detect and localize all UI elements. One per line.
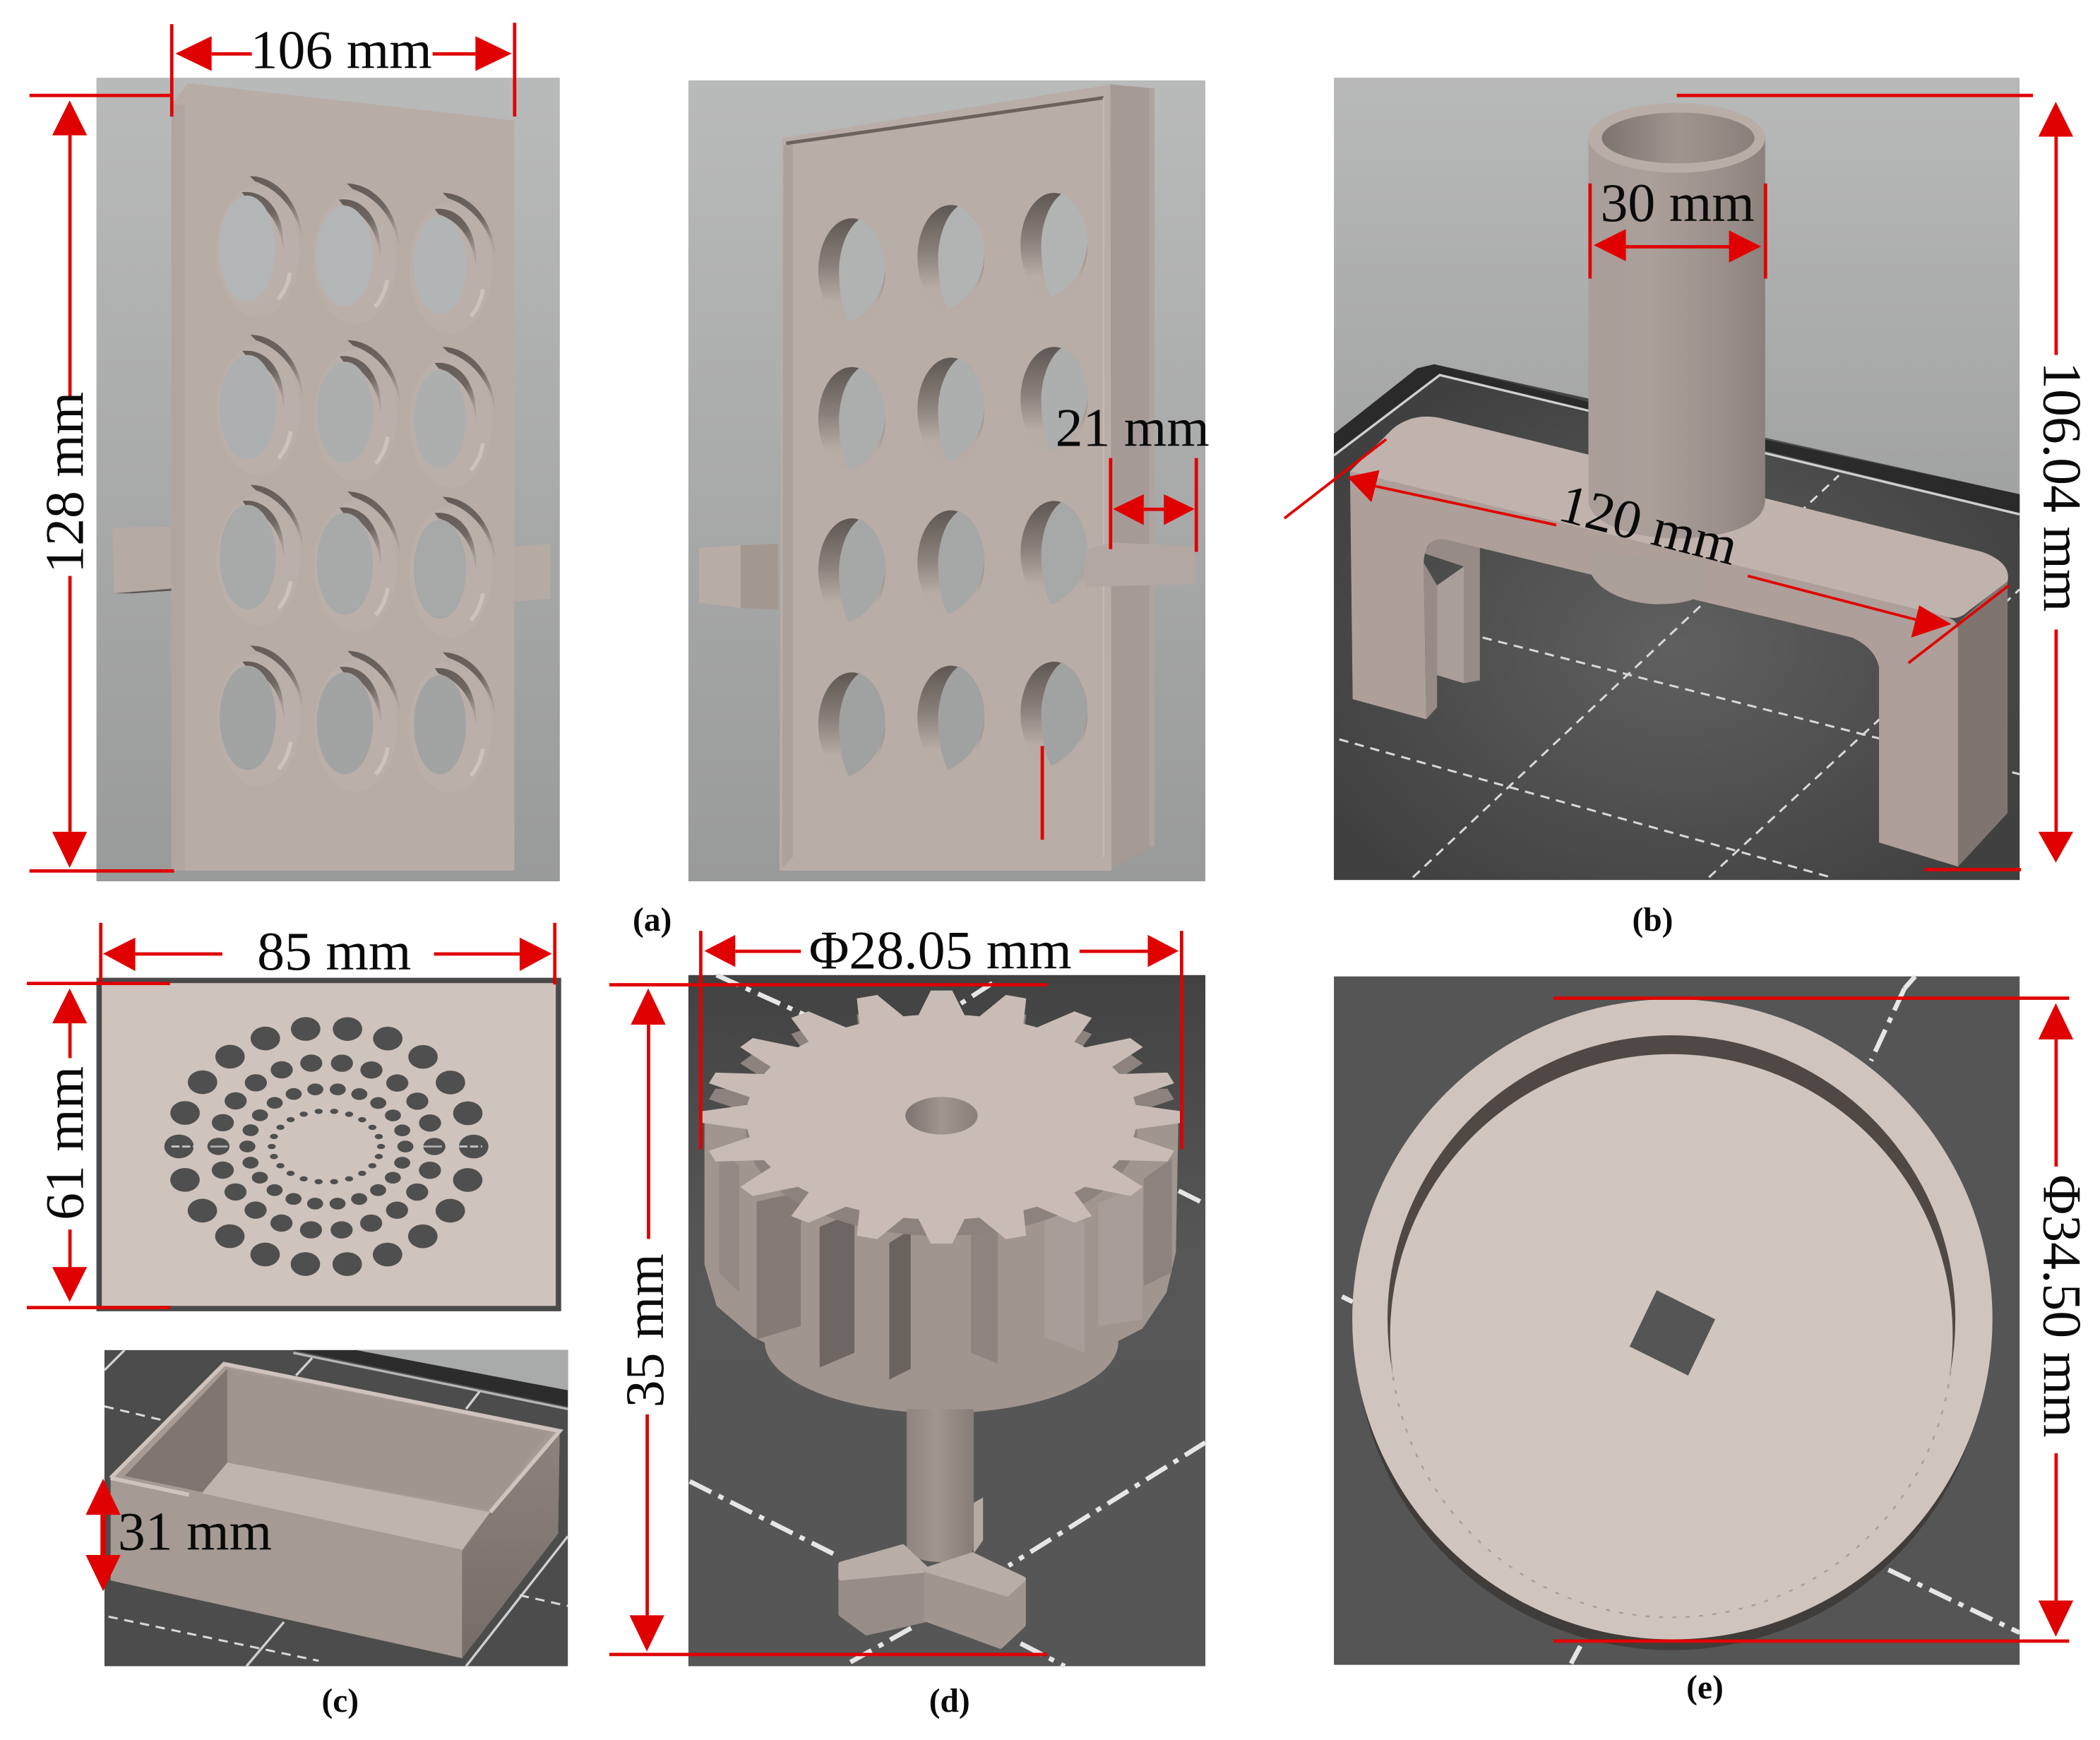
gear top (700, 991, 1183, 1244)
panel: part (c) perforated plate (99, 980, 559, 1309)
dimension: 106.04 mm (1677, 94, 2092, 871)
panel: part (d) gear (688, 975, 1205, 1666)
dimension: 128 mm (30, 94, 174, 873)
dimension: 61 mm: 61 mm (35, 1066, 95, 1220)
dimension: 85 mm (99, 921, 556, 984)
dimension: 30 mm: 30 mm (1601, 172, 1755, 233)
dimension: diameter 34.50 mm: Φ34.50 mm (2032, 1174, 2092, 1438)
panel: part (a) rear view (688, 81, 1205, 881)
label (d): (d) (929, 1683, 970, 1720)
perforation ring 3 (247, 1089, 405, 1204)
label (c): (c) (321, 1683, 359, 1720)
gear hub (765, 1271, 1118, 1413)
dimension: 106 mm (170, 20, 516, 117)
disc floor (1390, 1054, 1952, 1616)
dimension: diameter 28.05 mm: Φ28.05 mm (809, 919, 1072, 980)
shaft (907, 1409, 974, 1562)
plate (172, 83, 514, 871)
label (e): (e) (1686, 1669, 1724, 1706)
dimension: 128 mm: 128 mm (35, 392, 95, 573)
dimension: 120 mm: 120 mm (1553, 472, 1744, 577)
gear back-tooth walls (705, 1006, 1179, 1236)
cylinder (1588, 103, 1765, 538)
inner groove (1388, 1035, 1955, 1603)
grid (1334, 375, 2020, 877)
gear centre hole (905, 1097, 978, 1135)
panel: part (b) holder on build plate (1334, 78, 2020, 880)
frame (782, 97, 1104, 868)
disc shadow (1355, 1018, 1988, 1650)
panel: part (e) disc (1334, 977, 2020, 1665)
dimension: 35 mm: 35 mm (614, 1253, 675, 1407)
grid (1342, 977, 2020, 1664)
right lug (1082, 542, 1196, 587)
perforation ring 4 (272, 1111, 381, 1182)
label (a): (a) (633, 902, 672, 938)
dimension: 106.04 mm: 106.04 mm (2032, 362, 2092, 612)
gear side (705, 1112, 1179, 1386)
foot (841, 1498, 1023, 1646)
perforation ring 1 (179, 1027, 474, 1265)
square hole (1630, 1290, 1715, 1376)
box outer faces (111, 1364, 560, 1658)
build plate (1334, 364, 2020, 880)
disc (1352, 999, 1993, 1640)
dimension: 21 mm: 21 mm (1056, 398, 1210, 458)
holes (216, 176, 495, 793)
dimension: 21 mm (1056, 398, 1210, 552)
holder bridge body (1350, 417, 2008, 866)
side lugs (112, 526, 551, 602)
holder bridge: rear leg (1424, 537, 1480, 683)
plate side (1110, 85, 1155, 868)
plate front (780, 85, 1111, 871)
marker: red tick on part (a) (1041, 746, 1044, 840)
dimension: 31 mm: 31 mm (118, 1501, 272, 1561)
dimension: diameter 28.05 mm (699, 919, 1183, 1149)
floor edge line (1392, 1364, 1951, 1617)
left lug (699, 544, 778, 609)
label (b): (b) (1633, 902, 1673, 938)
grid (690, 975, 1205, 1666)
dimension: 31 mm (85, 1479, 272, 1591)
dimension: 106 mm: 106 mm (251, 20, 432, 81)
dimension: diameter 34.50 mm (1553, 996, 2092, 1643)
dimension: 120 mm (1284, 439, 2009, 663)
dimension: 30 mm (1588, 172, 1767, 279)
perforation ring 2 (218, 1062, 434, 1231)
dimension: 61 mm (27, 982, 170, 1309)
dimension: 35 mm (609, 983, 1047, 1656)
dimension: 85 mm: 85 mm (257, 921, 411, 982)
box interior (227, 1369, 549, 1510)
panel: part (a) front view (97, 78, 560, 881)
panel: part (c) box (105, 1350, 568, 1666)
holes (818, 193, 1087, 777)
